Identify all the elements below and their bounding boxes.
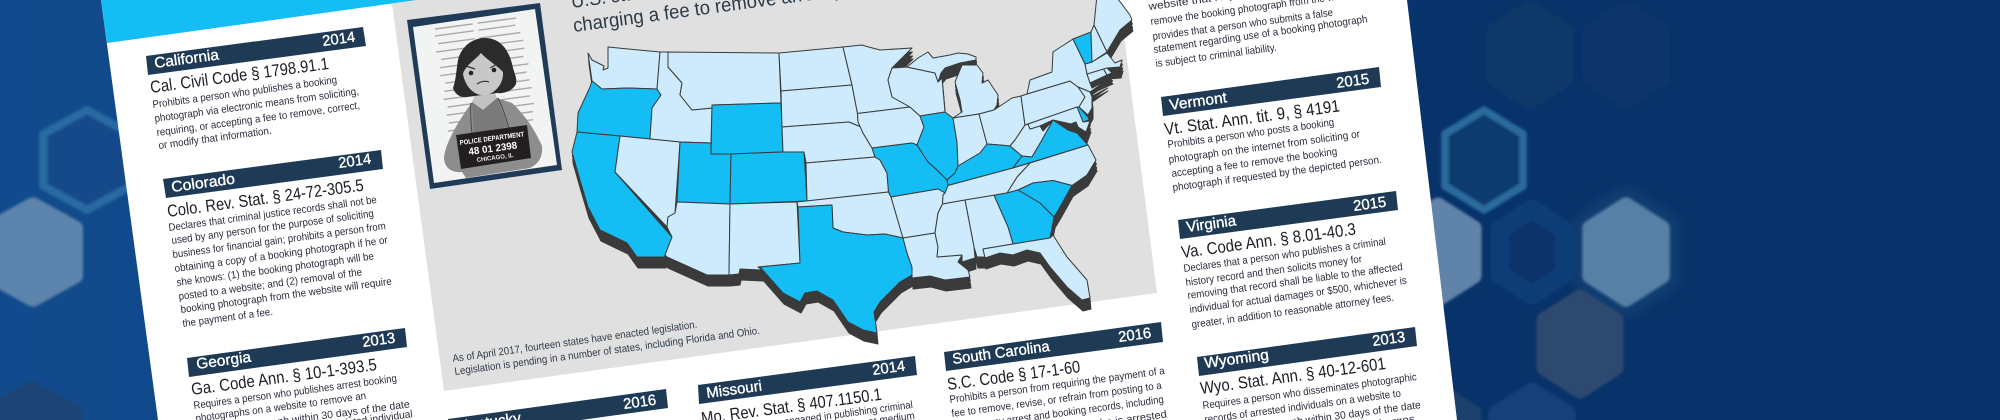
Vermont description: photograph if requested by the depicted person. <box>1172 154 1382 194</box>
panel: South Carolina <box>944 322 1168 420</box>
Vermont description <box>1167 117 1382 194</box>
South Carolina description: Prohibits a person from requiring the payment of a <box>949 365 1166 406</box>
map shadow <box>572 0 1133 344</box>
California year: 2014 <box>321 29 356 50</box>
Vermont year: 2015 <box>1335 71 1370 92</box>
Virginia year: 2015 <box>1352 194 1387 215</box>
map footnote: Legislation is pending in a number of states, including Florida and Ohio. <box>454 325 761 378</box>
hexagon pattern left <box>0 110 131 420</box>
California name: California <box>153 46 221 72</box>
California header bar <box>146 27 366 75</box>
South Carolina description: fee to remove, revise, or refrain from posting to a <box>951 380 1163 420</box>
mugshot frame <box>407 3 562 189</box>
Vermont name: Vermont <box>1168 89 1229 114</box>
Virginia description: removing that record shall be liable to the affected <box>1187 261 1404 302</box>
Colorado code: Colo. Rev. Stat. § 24-72-305.5 <box>166 176 365 221</box>
Virginia description: history record and then solicits money for <box>1185 253 1363 289</box>
Georgia year: 2013 <box>361 330 396 351</box>
mugshot illustration: 48 01 2398 <box>468 140 518 158</box>
Vermont description: photograph on the internet from soliciting or <box>1168 128 1361 166</box>
map footnote: As of April 2017, fourteen states have enacted legislation. <box>452 319 698 365</box>
Virginia description: greater, in addition to reasonable attorney fees. <box>1191 292 1395 331</box>
Virginia code: Va. Code Ann. § 8.01-40.3 <box>1180 220 1357 262</box>
Wyoming code: Wyo. Stat. Ann. § 40-12-601 <box>1199 354 1387 398</box>
lanyard <box>471 98 509 134</box>
Missouri header bar <box>698 356 917 404</box>
South Carolina year: 2016 <box>1117 325 1152 346</box>
Wyoming description: Requires a person who disseminates photographic <box>1202 371 1418 412</box>
Vermont header bar <box>1161 67 1381 116</box>
panel: California <box>146 27 366 152</box>
California description: or modify that information. <box>158 125 272 152</box>
US state map <box>572 0 1132 333</box>
neck <box>472 86 497 110</box>
Colorado description <box>168 194 393 330</box>
Colorado description: booking photograph from the website will require <box>180 276 393 316</box>
header band <box>101 0 417 43</box>
South Carolina code: S.C. Code § 17-1-60 <box>946 357 1081 394</box>
Kentucky year: 2016 <box>622 392 657 413</box>
mugshot illustration: CHICAGO, IL <box>476 152 514 164</box>
California description <box>152 74 361 152</box>
facial features <box>466 63 499 84</box>
Colorado description: Declares that criminal justice records shall not be <box>168 194 378 234</box>
Colorado description: posted to a website; and (2) removal of the <box>178 266 363 303</box>
panel: Utah continuation text: is subject to criminal liability. <box>1155 42 1277 70</box>
shirt torso <box>472 98 508 135</box>
Vermont code: Vt. Stat. Ann. tit. 9, § 4191 <box>1163 96 1341 139</box>
panel: Colorado <box>163 150 393 330</box>
California description: requiring, or accepting a fee to remove, correct, <box>156 100 361 139</box>
hexagon pattern right <box>1402 8 1662 420</box>
panel: Utah continuation text: provides that a person who submits a false <box>1152 7 1334 43</box>
Georgia header bar <box>187 328 407 377</box>
placard text: POLICE DEPARTMENT <box>459 131 525 147</box>
panel: Virginia <box>1178 191 1407 331</box>
map panel background <box>392 0 1157 391</box>
Georgia description: Requires a person who publishes arrest booking <box>193 373 398 412</box>
California code: Cal. Civil Code § 1798.91.1 <box>149 54 330 97</box>
Missouri year: 2014 <box>871 358 906 379</box>
panel: Georgia <box>187 328 413 420</box>
body <box>444 98 542 178</box>
placard <box>456 125 531 169</box>
Wyoming header bar <box>1197 327 1417 376</box>
panel: Utah continuation text <box>1147 0 1368 70</box>
Wyoming year: 2013 <box>1371 329 1406 350</box>
Vermont description: accepting a fee to remove the booking <box>1171 146 1338 180</box>
Georgia code: Ga. Code Ann. § 10-1-393.5 <box>190 355 378 399</box>
California description: Prohibits a person who publishes a booking <box>152 74 338 111</box>
Colorado description: she knows: (1) the booking photograph will be <box>176 250 375 289</box>
panel: Wyoming <box>1197 327 1422 420</box>
Virginia header bar <box>1178 191 1398 239</box>
Virginia name: Virginia <box>1185 212 1238 236</box>
Vermont description: Prohibits a person who posts a booking <box>1167 117 1335 151</box>
Colorado header bar <box>163 150 383 198</box>
Virginia description: individual for actual damages or $500, whichever is <box>1189 275 1407 316</box>
Colorado description: the payment of a fee. <box>182 306 274 330</box>
Kentucky header bar <box>448 389 668 420</box>
Missouri name: Missouri <box>705 378 763 402</box>
Colorado year: 2014 <box>337 151 372 172</box>
panel: Missouri <box>698 356 917 420</box>
Colorado description: obtaining a copy of a booking photograph if he or <box>174 234 389 275</box>
panel: Vermont <box>1161 67 1382 194</box>
Colorado description: business for financial gain; prohibits a person from <box>172 220 387 261</box>
hair <box>453 38 516 97</box>
Virginia description: Declares that a person who publishes a criminal <box>1183 236 1387 275</box>
Wyoming name: Wyoming <box>1203 346 1270 372</box>
South Carolina name: South Carolina <box>951 338 1051 368</box>
Colorado description: used by any person for the purpose of soliciting <box>171 208 375 247</box>
panel: Utah continuation text: statement regarding use of a booking photograph <box>1153 13 1368 56</box>
poster sheet <box>101 0 1457 420</box>
California description: photograph via electronic means from soliciting, <box>154 85 360 125</box>
Georgia name: Georgia <box>195 349 253 373</box>
Colorado name: Colorado <box>170 171 236 196</box>
face <box>463 53 503 95</box>
South Carolina header bar <box>944 322 1163 371</box>
mugshot illustration <box>407 3 562 189</box>
height chart lines <box>433 17 536 131</box>
panel: Kentucky <box>448 389 668 420</box>
Virginia description <box>1183 236 1407 331</box>
